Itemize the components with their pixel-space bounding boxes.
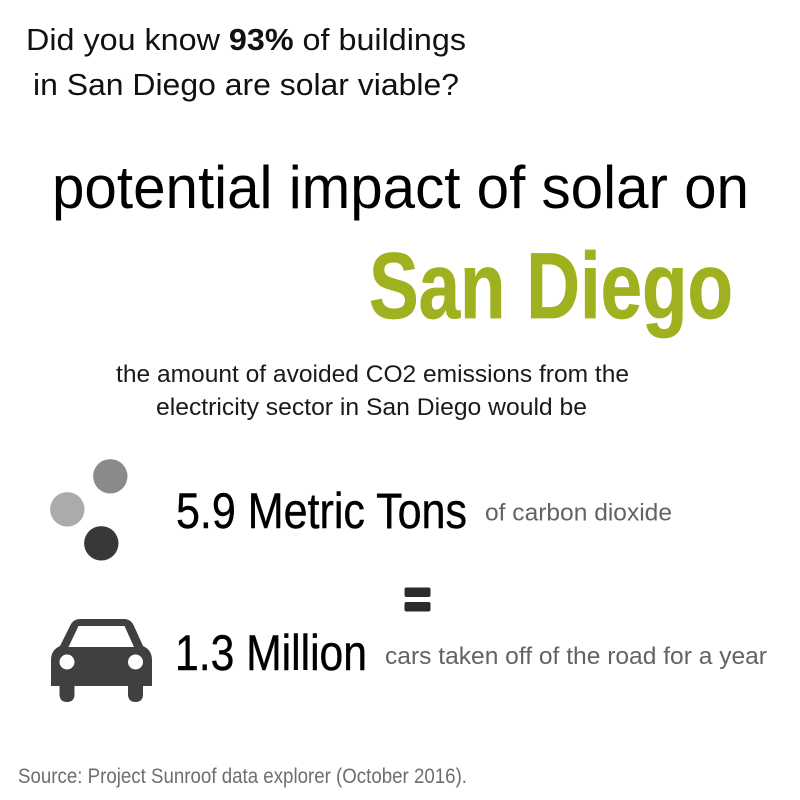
icon: car (51, 619, 152, 702)
subheading text (116, 361, 629, 421)
intro text: Did you know 93% of buildings (26, 22, 466, 57)
label: cars taken off the road: cars taken off of the road for a year (385, 643, 767, 670)
subheading text: the amount of avoided CO2 emissions from the (116, 361, 629, 388)
equals sign (404, 588, 430, 612)
label: of carbon dioxide: of carbon dioxide (485, 500, 672, 526)
source: Source: Project Sunroof data explorer (October 2016). (18, 765, 467, 788)
icon: carbon dioxide molecules (50, 459, 128, 560)
intro text (26, 22, 466, 102)
stat: 1.3 million: 1.3 Million (175, 625, 367, 681)
intro text: in San Diego are solar viable? (33, 67, 459, 102)
heading: potential impact of solar on (52, 154, 749, 221)
subheading text: electricity sector in San Diego would be (156, 394, 587, 421)
stat: 5.9 metric tons: 5.9 Metric Tons (176, 483, 467, 539)
